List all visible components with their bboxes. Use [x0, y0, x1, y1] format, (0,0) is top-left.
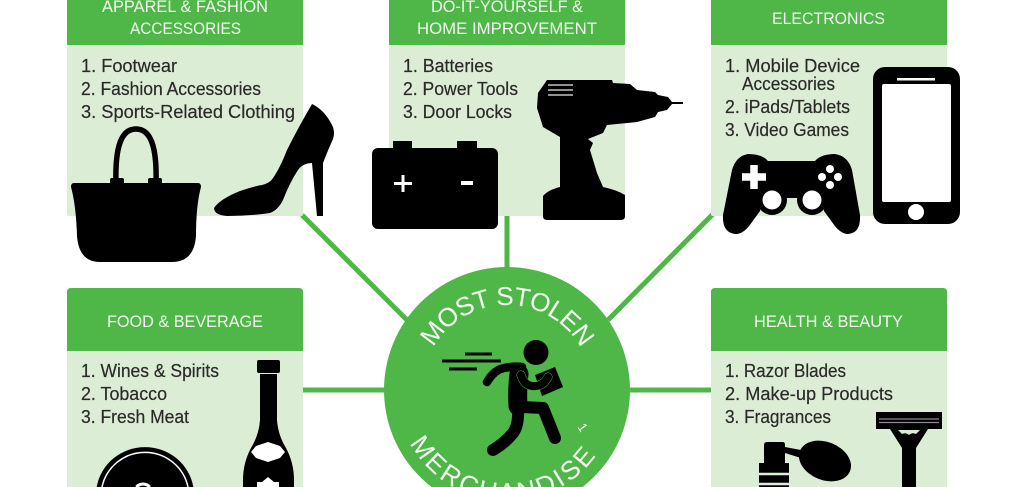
list: apparel: 2. Fashion Accessories — [81, 79, 261, 99]
title: most stolen: MOST STOLEN — [420, 286, 595, 346]
panel: electronics — [711, 0, 960, 234]
list: food: 1. Wines & Spirits — [81, 361, 219, 381]
list: electronics: 1. Mobile Device — [725, 56, 860, 76]
icon: power drill — [537, 80, 683, 220]
panel: food and beverage — [67, 288, 303, 487]
list: health: 3. Fragrances — [725, 407, 831, 427]
list: apparel: 3. Sports-Related Clothing — [81, 102, 295, 122]
heading: food: FOOD & BEVERAGE — [107, 312, 263, 331]
heading: apparel: ACCESSORIES — [130, 19, 241, 38]
connector lines — [302, 214, 713, 390]
icon: game controller — [723, 154, 860, 234]
icon: smartphone — [873, 67, 960, 224]
list: food: 3. Fresh Meat — [81, 407, 189, 427]
heading: electronics: ELECTRONICS — [772, 9, 885, 28]
list: electronics: 3. Video Games — [725, 120, 849, 140]
icon: high heel shoe — [214, 104, 334, 216]
panel: apparel and fashion — [67, 0, 334, 262]
list: diy: 3. Door Locks — [403, 102, 512, 122]
list: health: 1. Razor Blades — [725, 361, 846, 381]
list: diy: 2. Power Tools — [403, 79, 518, 99]
list: electronics: Accessories — [742, 74, 835, 94]
icon: wine bottle — [243, 360, 294, 487]
central circle badge — [384, 267, 630, 487]
panel: do-it-yourself — [372, 0, 683, 229]
footnote marker: 1 — [575, 420, 591, 435]
icon: razor — [876, 412, 942, 487]
panel: health and beauty — [711, 288, 947, 487]
list: diy — [403, 56, 518, 122]
icon: cut of meat — [97, 447, 193, 487]
list: diy: 1. Batteries — [403, 56, 493, 76]
list: electronics — [725, 56, 860, 140]
list: health — [725, 361, 893, 427]
icon: car battery — [372, 141, 498, 229]
list: apparel: 1. Footwear — [81, 56, 177, 76]
icon: handbag — [71, 129, 201, 262]
list: apparel — [81, 56, 295, 122]
heading: diy: HOME IMPROVEMENT — [417, 19, 597, 38]
list: food — [81, 361, 219, 427]
list: health: 2. Make-up Products — [725, 384, 893, 404]
heading: diy — [417, 0, 597, 38]
heading: apparel — [102, 0, 268, 38]
list: food: 2. Tobacco — [81, 384, 167, 404]
icon: perfume atomizer — [759, 433, 857, 487]
heading: health: HEALTH & BEAUTY — [754, 312, 903, 331]
list: electronics: 2. iPads/Tablets — [725, 97, 850, 117]
icon: running thief — [442, 340, 563, 450]
